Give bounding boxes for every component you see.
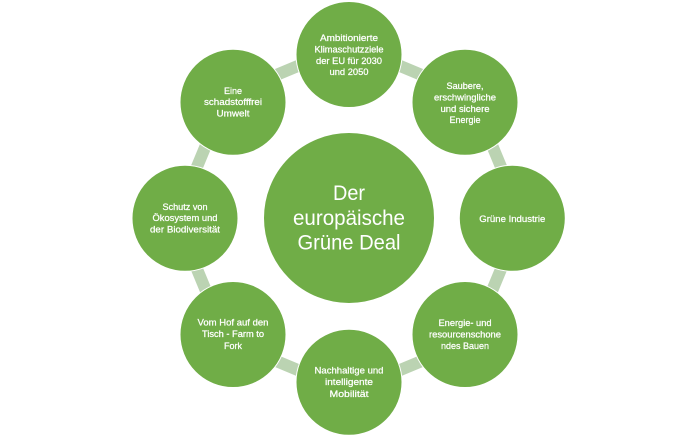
node: Nachhaltige und intelligente Mobilität: Nachhaltige und <box>314 366 384 376</box>
arrow: connector Nachhaltige to Vom Hof <box>274 356 301 376</box>
node: Saubere Energie: Energie <box>450 115 480 125</box>
node: Ambitionierte Klimaschutzziele: der EU für 2030 <box>316 56 382 66</box>
node: Vom Hof auf den Tisch: Fork <box>224 341 242 351</box>
node: Grüne Industrie <box>459 165 565 271</box>
node: Saubere Energie: Saubere, <box>446 81 484 91</box>
node: Eine schadstofffreie Umwelt: Umwelt <box>216 109 250 119</box>
node: Energie- und resourcenschonendes Bauen: Energie- und <box>438 318 492 328</box>
node: Nachhaltige und intelligente Mobilität: Mobilität <box>330 389 369 399</box>
node: Ambitionierte Klimaschutzziele: Ambitionierte <box>320 33 378 43</box>
arrow: connector Energie to Nachhaltige <box>397 356 424 376</box>
center node: Der europäische Grüne Deal: Grüne Deal <box>298 232 400 254</box>
node: Energie- und resourcenschonendes Bauen: resourcenschone <box>429 329 501 339</box>
node: Eine schadstofffreie Umwelt: schadstofffrei <box>204 97 262 107</box>
node: Nachhaltige und intelligente Mobilität: intelligente <box>325 377 373 387</box>
node: Energie- und resourcenschonendes Bauen <box>412 282 518 388</box>
arrow: connector Saubere to Grüne Industrie <box>487 143 507 170</box>
node: Nachhaltige und intelligente Mobilität <box>296 329 402 435</box>
node: Schutz von Ökosystem und der Biodiversität: Schutz von <box>162 202 208 212</box>
node: Eine schadstofffreie Umwelt <box>180 49 286 155</box>
node: Schutz von Ökosystem und der Biodiversität: Ökosystem und <box>152 213 218 223</box>
center node: Der europäische Grüne Deal: Der <box>333 182 365 205</box>
center node: Der europäische Grüne Deal: europäische <box>293 207 405 230</box>
node: Schutz von Ökosystem und der Biodiversität: der Biodiversität <box>150 225 220 235</box>
node: Eine schadstofffreie Umwelt: Eine <box>224 86 242 96</box>
center node: Der europäische Grüne Deal <box>264 132 434 304</box>
node: Grüne Industrie: Grüne Industrie <box>479 214 545 224</box>
node: Saubere Energie: erschwingliche <box>434 92 496 102</box>
node: Ambitionierte Klimaschutzziele <box>296 2 402 108</box>
arrow: connector Eine to top <box>274 60 301 80</box>
node: Ambitionierte Klimaschutzziele: Klimaschutzziele <box>314 44 384 54</box>
node: Saubere Energie <box>412 49 518 155</box>
node: Vom Hof auf den Tisch: Tisch - Farm to <box>202 329 264 339</box>
node: Ambitionierte Klimaschutzziele: und 2050 <box>330 67 368 77</box>
node: Vom Hof auf den Tisch <box>180 282 286 388</box>
node: Schutz von Ökosystem und der Biodiversität <box>132 165 238 271</box>
arrow: connector Vom Hof to Schutz <box>191 266 211 293</box>
arrow: connector top to Saubere <box>397 60 424 80</box>
arrow: connector Grüne Industrie to Energie <box>487 266 507 293</box>
node: Saubere Energie: und sichere <box>440 104 490 114</box>
arrow: connector Schutz to Eine <box>191 143 211 170</box>
node: Vom Hof auf den Tisch: Vom Hof auf den <box>198 318 268 328</box>
node: Energie- und resourcenschonendes Bauen: ndes Bauen <box>441 341 489 351</box>
